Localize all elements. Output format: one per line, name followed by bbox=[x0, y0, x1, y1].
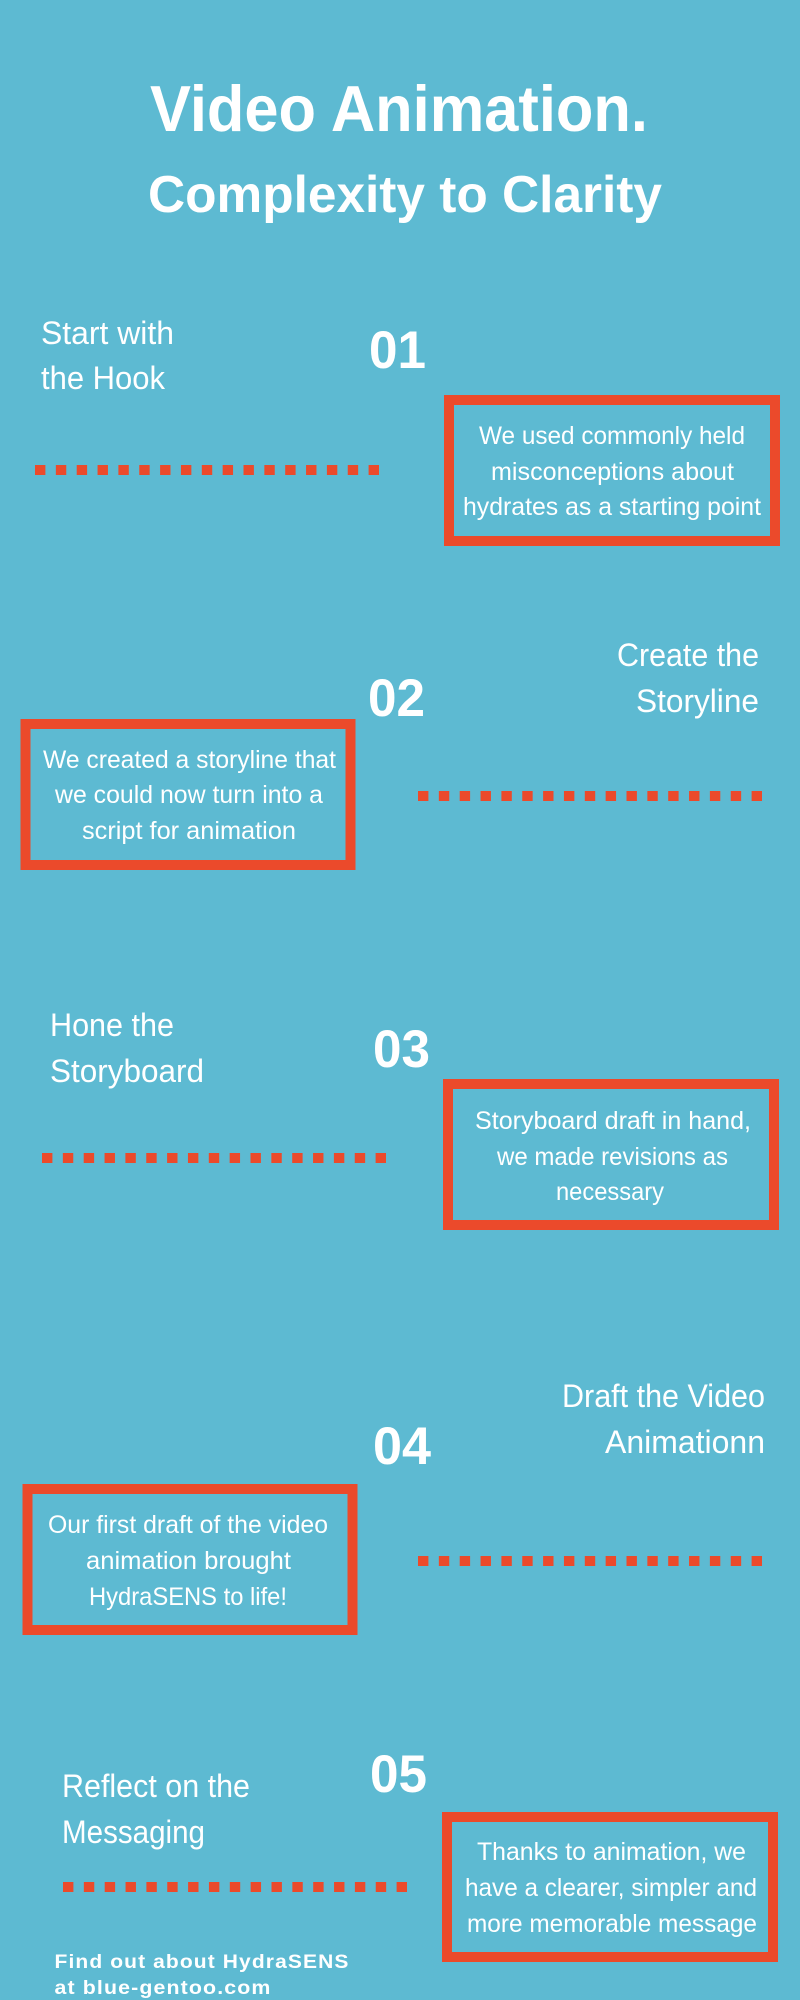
step 04 callout bbox=[28, 1489, 352, 1630]
step 03 heading bbox=[50, 1007, 204, 1089]
step 05 number: 05 bbox=[370, 1745, 427, 1804]
panel: step 05 bbox=[62, 1745, 773, 1957]
step 01 heading bbox=[41, 315, 174, 396]
step 01 callout: misconceptions about bbox=[491, 458, 734, 486]
step 03 heading: Storyboard bbox=[50, 1053, 204, 1089]
step 04 dotted line bbox=[418, 1556, 762, 1566]
step 03 callout: necessary bbox=[556, 1178, 664, 1206]
step 05 dotted line bbox=[63, 1882, 407, 1892]
step 01 callout: We used commonly held bbox=[479, 422, 745, 450]
step 04 heading: Draft the Video bbox=[562, 1378, 765, 1414]
step 05 callout: Thanks to animation, we bbox=[477, 1838, 746, 1866]
step 04 heading bbox=[562, 1378, 765, 1460]
step 03 heading: Hone the bbox=[50, 1007, 174, 1043]
step 02 heading: Create the bbox=[617, 637, 759, 673]
step 03 number: 03 bbox=[373, 1020, 430, 1079]
step 04 number: 04 bbox=[373, 1417, 432, 1476]
step 05 callout: more memorable message bbox=[467, 1910, 757, 1938]
step 03 dotted line bbox=[42, 1153, 386, 1163]
step 02 callout: We created a storyline that bbox=[43, 746, 336, 774]
title: Complexity to Clarity bbox=[148, 166, 662, 224]
step 03 callout: we made revisions as bbox=[496, 1143, 728, 1171]
step 02 dotted line bbox=[418, 791, 762, 801]
step 04 heading: Animationn bbox=[605, 1424, 765, 1460]
panel: step 01 bbox=[35, 315, 775, 541]
step 03 callout: Storyboard draft in hand, bbox=[475, 1107, 751, 1135]
step 05 callout: have a clearer, simpler and bbox=[465, 1874, 757, 1902]
step 05 heading bbox=[62, 1768, 250, 1850]
title bbox=[148, 72, 662, 224]
step 01 callout bbox=[449, 400, 775, 541]
step 01 number: 01 bbox=[369, 321, 426, 380]
step 02 number: 02 bbox=[368, 669, 425, 728]
step 01 heading: Start with bbox=[41, 315, 174, 351]
footer call to action: Find out about HydraSENS bbox=[54, 1952, 350, 1973]
step 02 heading: Storyline bbox=[636, 683, 759, 719]
footer call to action bbox=[54, 1952, 350, 1999]
panel: step 03 bbox=[42, 1007, 774, 1225]
title: Video Animation. bbox=[150, 72, 648, 145]
step 01 dotted line bbox=[35, 465, 379, 475]
step 04 callout: animation brought bbox=[86, 1547, 291, 1575]
step 01 callout: hydrates as a starting point bbox=[463, 493, 761, 521]
panel: step 02 bbox=[26, 637, 762, 865]
step 04 callout: Our first draft of the video bbox=[48, 1511, 328, 1539]
step 05 callout bbox=[447, 1817, 773, 1957]
step 02 heading bbox=[617, 637, 759, 719]
step 04 callout: HydraSENS to life! bbox=[89, 1583, 287, 1611]
panel: step 04 bbox=[28, 1378, 765, 1630]
step 05 heading: Reflect on the bbox=[62, 1768, 250, 1804]
step 02 callout: script for animation bbox=[82, 817, 296, 845]
step 05 heading: Messaging bbox=[62, 1814, 205, 1850]
footer call to action: at blue-gentoo.com bbox=[54, 1978, 272, 1999]
step 01 heading: the Hook bbox=[41, 360, 166, 396]
step 02 callout bbox=[26, 724, 350, 865]
step 03 callout bbox=[448, 1084, 774, 1225]
step 02 callout: we could now turn into a bbox=[54, 781, 323, 809]
